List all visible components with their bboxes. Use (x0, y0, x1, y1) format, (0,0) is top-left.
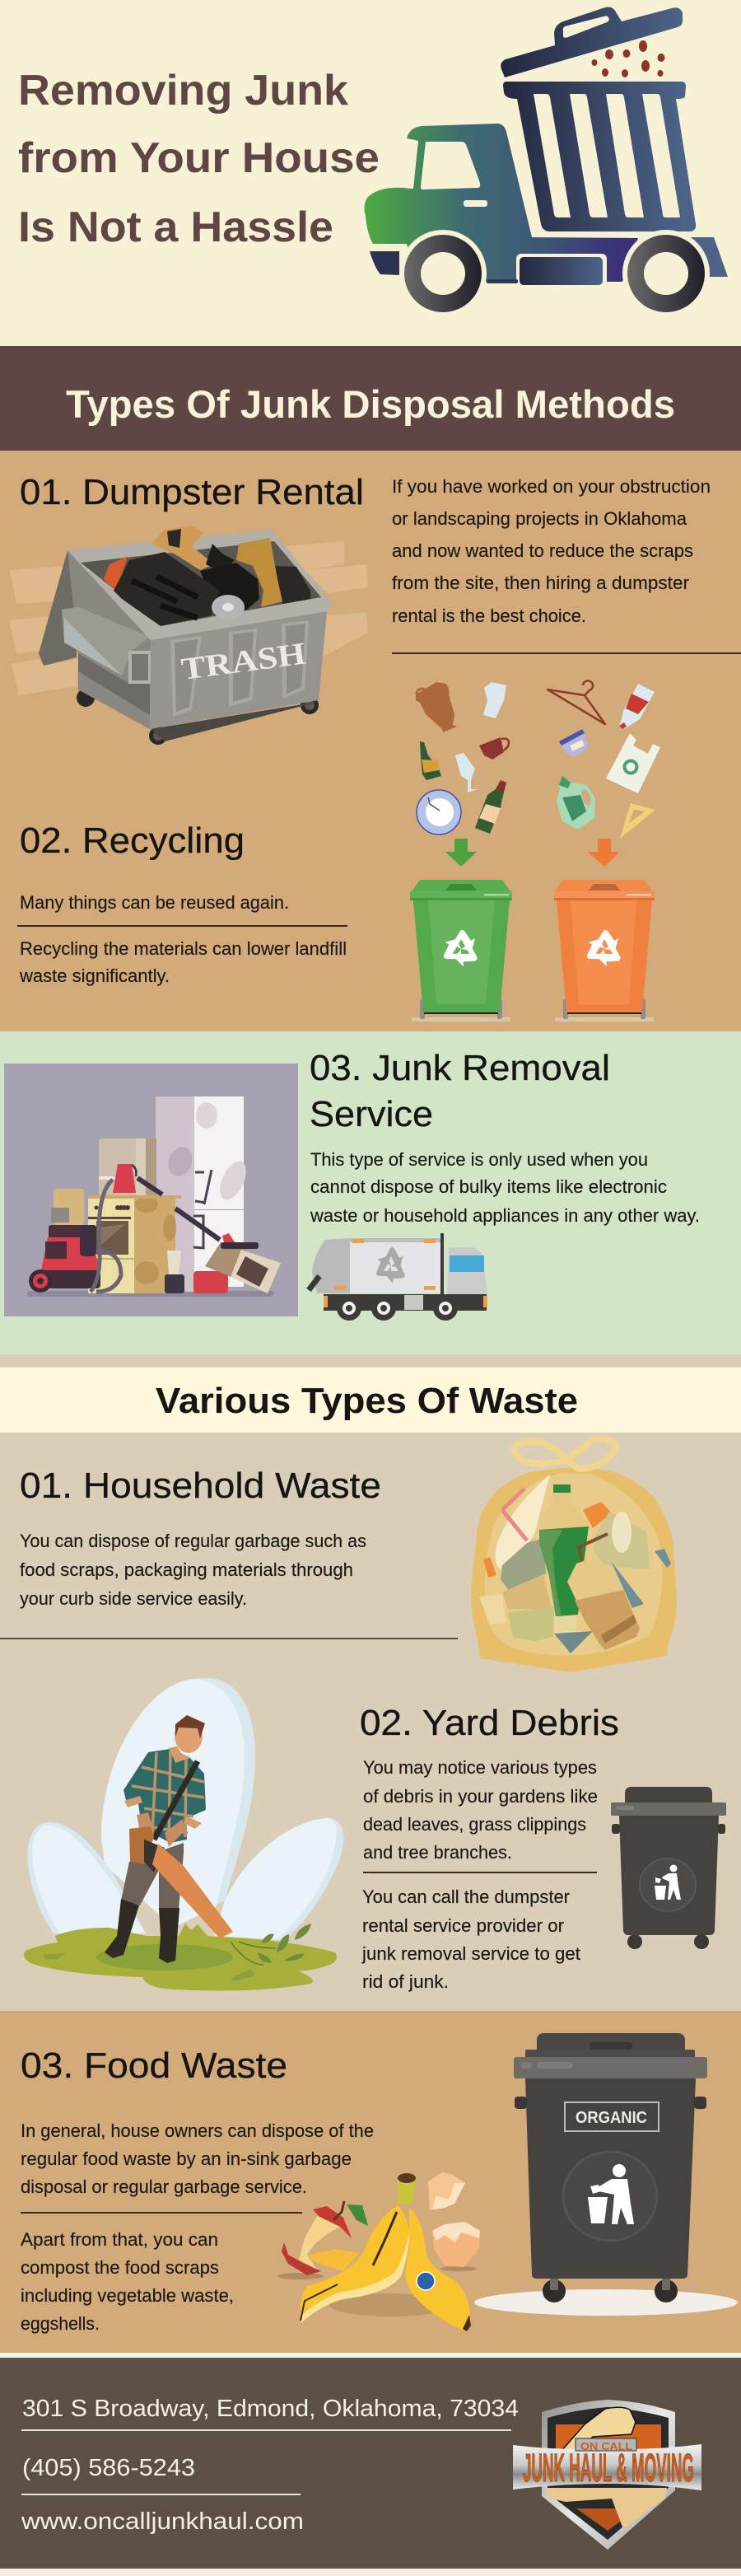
text: food waste description: including vegetable waste, (21, 2285, 234, 2306)
text: recycling description: Many things can be reused again. (20, 892, 289, 913)
arrow: orange down (588, 839, 620, 867)
icon: green recycling bin (410, 880, 512, 1022)
text: dumpster rental description: If you have worked on your obstruction (392, 476, 711, 497)
text: yard debris description: You can call the dumpster (362, 1886, 570, 1907)
heading: junk removal service: 03. Junk Removal (310, 1048, 610, 1088)
text: food waste description: In general, house owners can dispose of the (21, 2120, 374, 2141)
icon: orange recycling bin (554, 880, 655, 1022)
heading: junk removal service (310, 1048, 610, 1134)
text: address: 301 S Broadway, Edmond, Oklahoma, 73034 (22, 2396, 519, 2422)
panel: various types of waste (0, 1354, 741, 2011)
text: food waste description (21, 2120, 374, 2334)
text: food waste description: compost the food scraps (21, 2257, 219, 2278)
icon: person disposing trash (563, 2152, 657, 2241)
text: yard debris description: dead leaves, grass clippings (363, 1814, 586, 1835)
text: food waste description: Apart from that, you can (21, 2229, 218, 2250)
text: dumpster rental description: or landscaping projects in Oklahoma (392, 508, 687, 529)
panel: section banner (0, 346, 741, 451)
heading: household waste: 01. Household Waste (20, 1466, 381, 1506)
text: junk removal description (310, 1149, 700, 1226)
text: yard debris description: junk removal service to get (361, 1943, 580, 1964)
text: yard debris description: You may notice various types (363, 1757, 597, 1778)
heading: various types of waste: Various Types Of Waste (156, 1381, 578, 1421)
label: organic: ORGANIC (576, 2109, 647, 2127)
text: junk removal description: cannot dispose of bulky items like electronic (310, 1176, 667, 1197)
text: dumpster rental description: and now wanted to reduce the scraps (392, 540, 693, 561)
title: Removing Junk (18, 67, 348, 115)
logo: junk haul and moving (513, 2400, 701, 2550)
heading: types of junk disposal methods: Types Of Junk Disposal Methods (66, 382, 675, 426)
text: food waste description: disposal or regular garbage service. (21, 2176, 307, 2197)
text: junk removal description: This type of service is only used when you (310, 1149, 648, 1170)
text: household waste description (20, 1531, 366, 1609)
heading: junk removal service: Service (310, 1094, 433, 1134)
bottom strip (0, 2569, 741, 2576)
text: dumpster rental description: from the site, then hiring a dumpster (392, 573, 689, 593)
text: website: www.oncalljunkhaul.com (21, 2508, 304, 2535)
panel: junk removal service (0, 1031, 741, 1354)
icons: recyclable items right (548, 680, 660, 839)
divider strip (0, 2353, 741, 2358)
label: trash: TRASH (179, 636, 308, 687)
text: household waste description: food scraps, packaging materials through (20, 1559, 353, 1580)
heading: dumpster rental: 01. Dumpster Rental (20, 472, 364, 512)
text: recycling description (17, 892, 347, 986)
text: yard debris description: rental service provider or (362, 1915, 564, 1936)
text: yard debris description (361, 1757, 598, 1992)
text: food waste description: regular food waste by an in-sink garbage (21, 2148, 352, 2169)
text: household waste description: You can dispose of regular garbage such as (20, 1531, 366, 1551)
text: yard debris description: rid of junk. (362, 1971, 449, 1992)
text: junk removal description: waste or household appliances in any other way. (310, 1205, 700, 1226)
text: yard debris description: and tree branches. (363, 1842, 512, 1863)
icon: dump truck with trash can (364, 7, 728, 317)
illustration: old appliances (4, 1064, 298, 1316)
text: dumpster rental description: rental is the best choice. (392, 605, 586, 626)
text: food waste description: eggshells. (21, 2313, 100, 2334)
text: recycling description: waste significantly. (19, 965, 170, 986)
title (18, 67, 380, 251)
logo text: ON CALL (580, 2440, 632, 2452)
illustration: food scraps (277, 2172, 480, 2331)
illustration: garbage bag (471, 1439, 677, 1672)
panel: footer (0, 2358, 741, 2569)
text: recycling description: Recycling the materials can lower landfill (20, 938, 347, 959)
panel: food waste (0, 2011, 741, 2353)
title: Is Not a Hassle (18, 203, 333, 251)
icon: organic trash bin (474, 2033, 738, 2316)
text: household waste description: your curb side service easily. (20, 1588, 247, 1609)
text: dumpster rental description (392, 476, 711, 626)
label: organic (565, 2102, 659, 2131)
heading: yard debris: 02. Yard Debris (360, 1703, 619, 1743)
arrow: green down (445, 839, 477, 867)
heading: food waste: 03. Food Waste (21, 2045, 287, 2086)
icons: recyclable items left (416, 682, 509, 835)
title: from Your House (18, 134, 380, 182)
text: phone: (405) 586-5243 (22, 2455, 195, 2481)
illustration: man with leaf blower (24, 1678, 343, 1990)
panel: dumpster rental and recycling (0, 451, 741, 1031)
icon: garbage truck (309, 1233, 487, 1321)
heading: recycling: 02. Recycling (20, 820, 245, 861)
panel: header (0, 0, 741, 346)
icon: small dark trash bin (611, 1787, 726, 1949)
text: yard debris description: of debris in your gardens like (363, 1786, 598, 1807)
illustration: dumpster (9, 526, 368, 745)
